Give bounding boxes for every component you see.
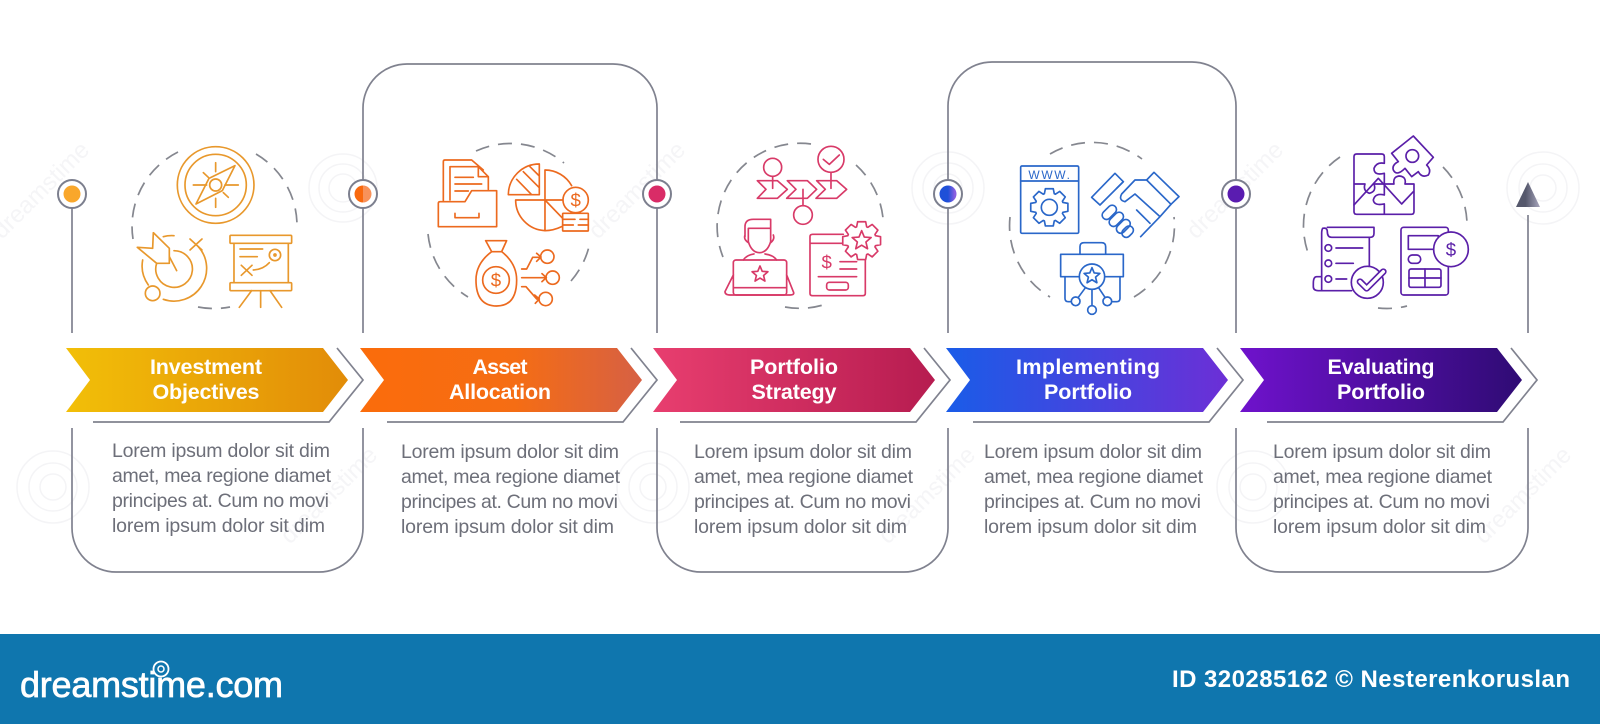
text block 4 — [984, 441, 1204, 538]
step 4 arrow: Implementing Portfolio: Portfolio — [1044, 380, 1132, 404]
text block 1 — [112, 440, 332, 537]
image id and author credit: ID 320285162 © Nesterenkoruslan — [1172, 666, 1570, 693]
step 3 arrow: Portfolio Strategy: Portfolio — [750, 355, 838, 379]
text block 3: Lorem ipsum dolor sit dim — [694, 441, 912, 463]
timeline node 3 — [643, 180, 671, 208]
text block 4: Lorem ipsum dolor sit dim — [984, 441, 1202, 463]
step 3 arrow: Portfolio Strategy: Strategy — [752, 380, 837, 404]
text block 3: principes at. Cum no movi — [694, 491, 911, 513]
text block 5: lorem ipsum dolor sit dim — [1273, 516, 1486, 538]
watermark — [0, 136, 1579, 549]
text block 5: Lorem ipsum dolor sit dim — [1273, 441, 1491, 463]
text block 2: Lorem ipsum dolor sit dim — [401, 441, 619, 463]
icon group: asset allocation — [428, 143, 590, 306]
step 2 arrow: Asset Allocation — [360, 348, 657, 422]
step 3 arrow: Portfolio Strategy — [653, 348, 950, 422]
step 5 arrow: Evaluating Portfolio: Portfolio — [1337, 380, 1425, 404]
footer logo: dreamstime.com — [20, 664, 283, 705]
step 1 arrow: Investment Objectives: Objectives — [152, 380, 260, 404]
text block 2: lorem ipsum dolor sit dim — [401, 516, 614, 538]
step 1 arrow: Investment Objectives: Investment — [150, 355, 262, 379]
timeline node 5 — [1222, 180, 1250, 208]
step 4 arrow: Implementing Portfolio — [946, 348, 1243, 422]
icon group: portfolio strategy — [717, 143, 883, 308]
watermark: dreamstime — [583, 136, 691, 244]
text block 1: Lorem ipsum dolor sit dim — [112, 440, 330, 462]
text block 4: principes at. Cum no movi — [984, 491, 1201, 513]
icon group: asset allocation: $ — [570, 190, 581, 211]
text block 1: lorem ipsum dolor sit dim — [112, 515, 325, 537]
text block 3 — [694, 441, 914, 538]
timeline frame lines — [72, 62, 1528, 572]
text block 5 — [1273, 441, 1493, 538]
step 5 arrow: Evaluating Portfolio: Evaluating — [1328, 355, 1434, 379]
text block 3: lorem ipsum dolor sit dim — [694, 516, 907, 538]
text block 2: amet, mea regione diamet — [401, 466, 621, 488]
step 4 arrow: Implementing Portfolio: Implementing — [1016, 355, 1160, 379]
step 2 arrow: Asset Allocation: Asset — [472, 355, 528, 379]
text block 1: principes at. Cum no movi — [112, 490, 329, 512]
text block 4: amet, mea regione diamet — [984, 466, 1204, 488]
watermark: dreamstime — [1181, 136, 1289, 244]
watermark: dreamstime — [1469, 441, 1577, 549]
icon group: asset allocation: $ — [491, 270, 502, 291]
text block 3: amet, mea regione diamet — [694, 466, 914, 488]
step 1 arrow: Investment Objectives — [66, 348, 363, 422]
watermark: dreamstime — [873, 441, 981, 549]
step 5 arrow: Evaluating Portfolio — [1240, 348, 1537, 422]
timeline end triangle — [1516, 182, 1540, 207]
icon group: implementing portfolio: WWW. — [1028, 168, 1072, 182]
watermark: dreamstime — [275, 441, 383, 549]
timeline node 4 — [934, 180, 962, 208]
text block 2: principes at. Cum no movi — [401, 491, 618, 513]
text block 4: lorem ipsum dolor sit dim — [984, 516, 1197, 538]
text block 5: principes at. Cum no movi — [1273, 491, 1490, 513]
step 2 arrow: Asset Allocation: Allocation — [449, 380, 551, 404]
timeline node 2 — [349, 180, 377, 208]
icon group: evaluating portfolio — [1303, 136, 1468, 308]
text block 5: amet, mea regione diamet — [1273, 466, 1493, 488]
text block 1: amet, mea regione diamet — [112, 465, 332, 487]
timeline node 1 — [58, 180, 86, 208]
icon group: implementing portfolio — [1010, 142, 1179, 314]
footer band — [0, 634, 1600, 724]
text block 2 — [401, 441, 621, 538]
icon group: evaluating portfolio: $ — [1446, 239, 1457, 260]
icon group: investment objectives — [132, 147, 297, 309]
icon group: portfolio strategy: $ — [821, 251, 832, 272]
